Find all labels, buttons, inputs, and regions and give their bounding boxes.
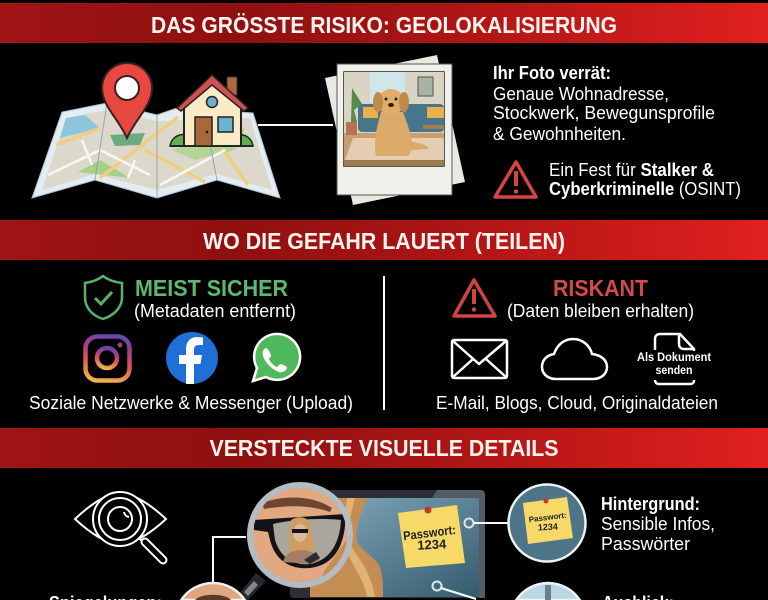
heading: meist sicher: MEIST SICHER (135, 275, 288, 301)
text block: Ihr Foto verrät: Ihr Foto verrät: (493, 63, 611, 83)
icon: warning triangle (454, 280, 495, 316)
panel: meist sicher (29, 275, 353, 413)
icon: folded map (32, 103, 280, 198)
photo stack (325, 55, 465, 205)
sticky note (398, 505, 465, 568)
subheading: metadaten entfernt: (Metadaten entfernt) (134, 301, 296, 321)
sticky note: 1234 (417, 536, 447, 553)
text block: hintergrund (601, 494, 715, 554)
detail circle: hintergrund: Passwort: (528, 511, 567, 524)
icon: map pin (102, 63, 152, 138)
icon: document (637, 334, 711, 384)
text block: Ein Fest für Stalker: Cyberkriminelle (OSINT) (549, 179, 741, 199)
text block: Ihr Foto verrät: & Gewohnheiten. (493, 124, 626, 144)
hotspot lines (213, 518, 509, 599)
icon: document: Als Dokument (637, 352, 711, 364)
text block: Ein Fest für Stalker: Ein Fest für Stalker & (549, 160, 714, 180)
banner: Das größte Risiko: DAS GRÖSSTE RISIKO: GEOLOKALISIERUNG (151, 12, 617, 38)
connector line (258, 124, 333, 126)
text block: hintergrund: Passwörter (601, 534, 690, 554)
icon: warning triangle (495, 162, 536, 197)
panel: riskant (436, 275, 718, 413)
icon: cloud (542, 339, 607, 379)
caption: soziale netzwerke: Soziale Netzwerke & Messenger (Upload) (29, 393, 353, 413)
heading: riskant: RISKANT (553, 275, 649, 301)
laptop with screen (290, 490, 485, 598)
detail circle: hintergrund: 1234 (538, 521, 558, 533)
icon: shield check (85, 276, 122, 319)
text block: hintergrund: Hintergrund: (601, 494, 700, 514)
banner: Wo die Gefahr lauert (0, 220, 768, 260)
banner: Versteckte visuelle Details (0, 428, 768, 468)
detail circle: ausblick (516, 583, 580, 600)
detail circle: hintergrund (508, 484, 586, 562)
icon: eye with magnifier (75, 492, 166, 560)
magnifier with reflection (234, 485, 350, 600)
icon: envelope (452, 340, 507, 378)
caption: e-mail blogs cloud: E-Mail, Blogs, Cloud, Originaldateien (436, 393, 718, 413)
dog (373, 89, 428, 156)
icon: instagram (86, 336, 130, 380)
icon: whatsapp (253, 334, 300, 381)
text block: Ein Fest für Stalker (549, 160, 741, 199)
icon: facebook (166, 332, 218, 384)
text block: Ihr Foto verrät: Genaue Wohnadresse, (493, 84, 669, 104)
sticky note: Passwort: (402, 523, 457, 543)
subheading: daten bleiben erhalten: (Daten bleiben erhalten) (507, 301, 694, 321)
detail circle: spiegelungen (181, 583, 245, 600)
banner: Das größte Risiko (0, 3, 768, 43)
text block: hintergrund: Sensible Infos, (601, 514, 715, 534)
icon: document: senden (656, 365, 692, 377)
divider (383, 276, 385, 410)
banner: Wo die Gefahr lauert: WO DIE GEFAHR LAUERT (TEILEN) (203, 228, 565, 254)
banner: Versteckte visuelle Details: VERSTECKTE VISUELLE DETAILS (210, 435, 558, 461)
text block: Ihr Foto verrät (493, 63, 715, 144)
text block: Ihr Foto verrät: Stockwerk, Bewegunsprofile (493, 103, 715, 123)
icon: house (170, 75, 253, 146)
